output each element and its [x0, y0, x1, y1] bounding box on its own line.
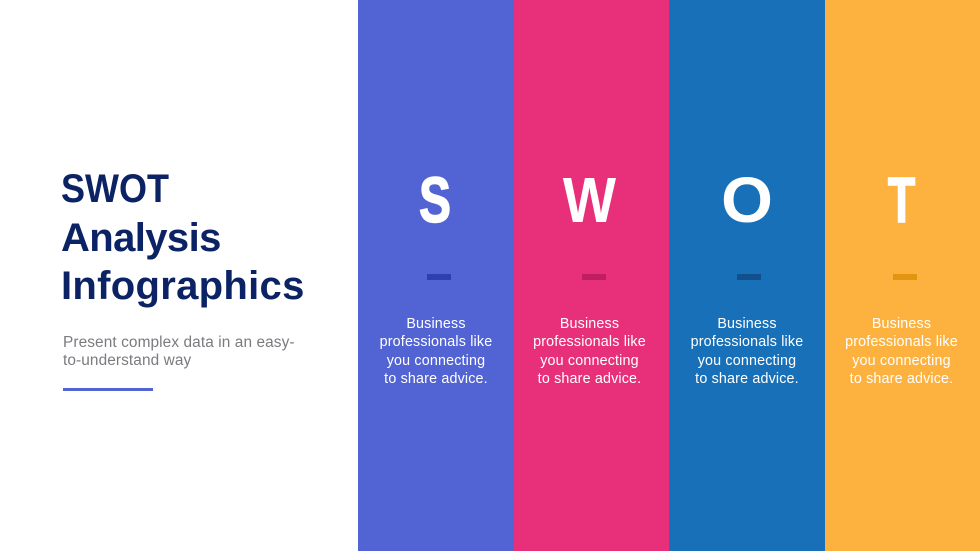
text S — [380, 316, 492, 387]
title: SWOT — [61, 167, 169, 211]
text T: you connecting — [852, 353, 951, 369]
text W: Business — [560, 316, 619, 332]
text W — [533, 316, 646, 387]
letter S: S — [419, 164, 451, 236]
text T: professionals like — [845, 334, 958, 350]
text W: you connecting — [540, 353, 639, 369]
text O: to share advice. — [695, 371, 799, 387]
subtitle: Present complex data in an easy- — [63, 334, 295, 351]
subtitle: to-understand way — [63, 352, 191, 369]
title: Analysis — [61, 216, 221, 260]
text T — [845, 316, 958, 387]
panel: weaknesses — [514, 0, 669, 551]
text O: professionals like — [691, 334, 803, 350]
text W: professionals like — [533, 334, 646, 350]
accent line — [63, 388, 153, 391]
text S: you connecting — [387, 353, 485, 369]
letter O: O — [721, 164, 773, 236]
panel: threats — [825, 0, 980, 551]
title — [61, 167, 305, 308]
panel: opportunities — [669, 0, 825, 551]
text S: professionals like — [380, 334, 492, 350]
dash S — [426, 274, 450, 280]
text O: you connecting — [698, 353, 796, 369]
text S: Business — [406, 316, 466, 332]
text T: Business — [872, 316, 931, 332]
text T: to share advice. — [850, 371, 953, 387]
text S: to share advice. — [384, 371, 488, 387]
subtitle — [63, 334, 295, 369]
text W: to share advice. — [538, 371, 641, 387]
dash T — [892, 274, 916, 280]
dash W — [582, 274, 606, 280]
text O — [691, 316, 803, 387]
letter T: T — [887, 164, 915, 236]
dash O — [737, 274, 761, 280]
text O: Business — [717, 316, 777, 332]
panel: strengths — [358, 0, 514, 551]
letter W: W — [563, 164, 616, 236]
title: Infographics — [61, 264, 305, 308]
